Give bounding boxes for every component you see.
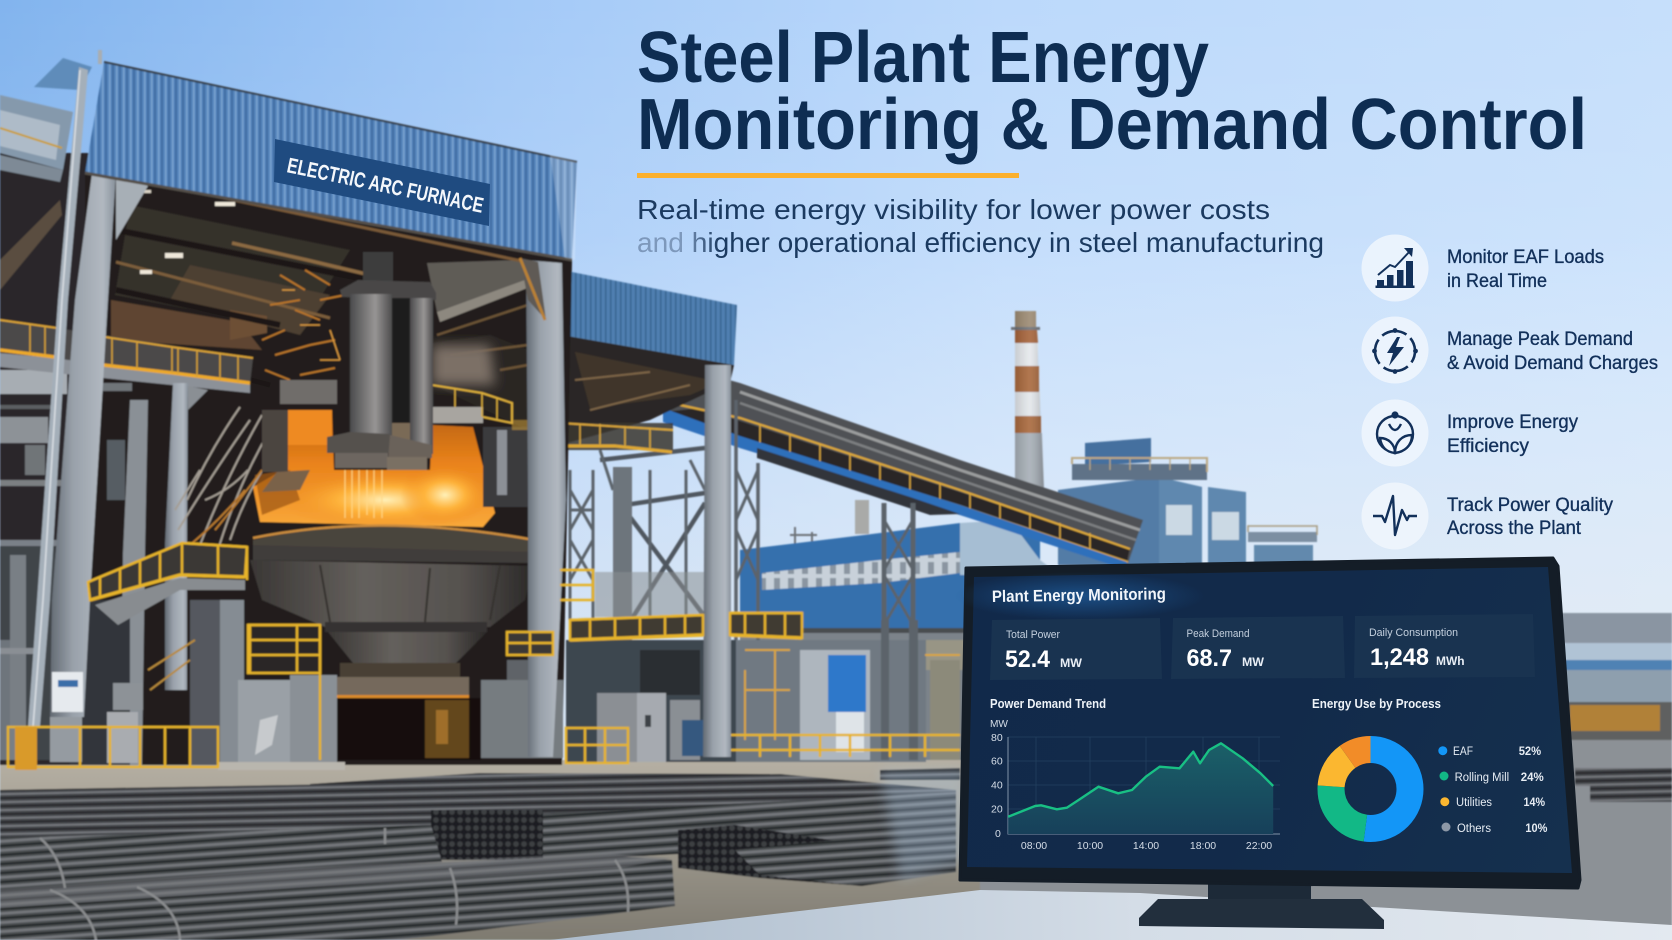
feature: monitor EAF loads: Monitor EAF Loads bbox=[1447, 247, 1604, 268]
front rebar bundles bbox=[0, 825, 675, 940]
chart axis labels: 0 bbox=[995, 828, 1001, 840]
desk surface bbox=[550, 890, 1672, 940]
KPI card: total power: 52.4 bbox=[1005, 646, 1051, 673]
feature: track power quality: Across the Plant bbox=[1447, 518, 1582, 539]
donut legend: Others bbox=[1457, 823, 1491, 835]
fire and molten glow bbox=[253, 410, 495, 530]
furnace base and tap opening bbox=[107, 600, 563, 770]
KPI card: daily consumption: Daily Consumption bbox=[1369, 627, 1458, 639]
chart axis labels: 08:00 bbox=[1021, 840, 1047, 852]
donut chart: energy use by process bbox=[1331, 750, 1410, 828]
chart axis labels: MW bbox=[990, 718, 1008, 730]
main grey columns bbox=[28, 67, 731, 762]
haze over left of monitor bbox=[880, 770, 965, 880]
far right shed building bbox=[1555, 613, 1672, 748]
right platform yellow rails bbox=[570, 613, 802, 640]
feature: track power quality: Track Power Quality bbox=[1447, 495, 1613, 516]
KPI card: daily consumption: 1,248 bbox=[1370, 644, 1429, 671]
main title bbox=[637, 18, 1587, 165]
underside of second roof bbox=[560, 335, 734, 452]
KPI card: total power bbox=[990, 618, 1162, 680]
icon: leaf in ring bbox=[1377, 413, 1413, 453]
KPI card: peak demand: 68.7 bbox=[1186, 645, 1232, 672]
hazy machinery behind trusses bbox=[595, 572, 705, 617]
striped chimney bbox=[1011, 311, 1044, 490]
chart axis labels: 20 bbox=[991, 804, 1003, 816]
second roof left return bbox=[460, 285, 530, 330]
stair platform yellow rails bbox=[88, 543, 593, 760]
column behind right platform bbox=[613, 467, 632, 760]
title glow bbox=[955, 572, 1205, 620]
first roof with corrugated panel bbox=[85, 62, 577, 260]
hall secondary columns bbox=[70, 383, 208, 765]
donut legend: 52% bbox=[1519, 746, 1541, 758]
KPI card: total power: MW bbox=[1060, 656, 1083, 670]
icon: bolt in dial bbox=[1367, 323, 1423, 379]
chart axis labels: 22:00 bbox=[1246, 840, 1272, 852]
monitor screen bbox=[967, 567, 1572, 873]
donut legend bbox=[1438, 746, 1547, 835]
icon: waveform bbox=[1373, 496, 1417, 535]
KPI card: peak demand: MW bbox=[1242, 655, 1265, 669]
chart axis labels bbox=[990, 718, 1272, 852]
main title: Steel Plant Energy bbox=[637, 18, 1209, 98]
feature: manage peak demand bbox=[1362, 316, 1658, 384]
icon: rising bar chart bbox=[1376, 248, 1414, 288]
feature: monitor EAF loads bbox=[1362, 234, 1604, 302]
monitor stand bbox=[1139, 880, 1384, 929]
donut legend: 14% bbox=[1524, 797, 1545, 809]
feature: improve energy efficiency bbox=[1362, 400, 1578, 466]
chart heading: power demand trend: Power Demand Trend bbox=[990, 696, 1106, 711]
title underline bbox=[637, 173, 1019, 178]
small distant chimney and mast bbox=[790, 500, 869, 545]
KPI card: peak demand: Peak Demand bbox=[1186, 628, 1250, 640]
machinery below right platform bbox=[566, 620, 960, 762]
feature: track power quality bbox=[1362, 482, 1613, 550]
feature: manage peak demand: Manage Peak Demand bbox=[1447, 329, 1633, 350]
chart axis labels: 10:00 bbox=[1077, 840, 1103, 852]
donut legend: Utilities bbox=[1456, 797, 1492, 809]
sign: electric arc furnace bbox=[274, 139, 490, 226]
electrode columns bbox=[327, 252, 436, 470]
ground level yellow fences bbox=[8, 727, 960, 770]
ground concrete bbox=[0, 740, 1672, 940]
chart axis labels: 14:00 bbox=[1133, 840, 1159, 852]
subtitle bbox=[637, 194, 1324, 258]
KPI card: total power: Total Power bbox=[1006, 629, 1060, 641]
dashboard title: Plant Energy Monitoring bbox=[992, 585, 1166, 606]
right blue process building bbox=[1058, 438, 1317, 565]
second roof panel bbox=[562, 270, 737, 365]
mottled machinery left of electrodes bbox=[262, 270, 345, 380]
line chart: power demand trend bbox=[990, 718, 1280, 852]
grey electrical cabinet bbox=[597, 693, 666, 762]
KPI card: daily consumption bbox=[1354, 614, 1535, 678]
main title: Monitoring & Demand Control bbox=[637, 85, 1587, 165]
feature: manage peak demand: & Avoid Demand Charges bbox=[1447, 353, 1658, 374]
donut legend: 24% bbox=[1521, 772, 1544, 784]
sign: electric arc furnace: ELECTRIC ARC FURNACE bbox=[285, 153, 486, 218]
monitor bezel bbox=[960, 558, 1580, 888]
hoses and cables left of furnace bbox=[175, 407, 285, 560]
KPI card: daily consumption: MWh bbox=[1436, 654, 1464, 668]
chart axis labels: 18:00 bbox=[1190, 840, 1216, 852]
dark rebar end stacks bbox=[431, 810, 956, 886]
donut legend: EAF bbox=[1453, 746, 1473, 758]
steel truss towers bbox=[570, 400, 913, 760]
main hall interior bbox=[85, 173, 572, 765]
furnace transformer block bbox=[262, 380, 337, 492]
conveyor bridge bbox=[663, 372, 1143, 570]
donut legend: 10% bbox=[1525, 823, 1547, 835]
subtitle: and higher operational efficiency in steel manufacturing bbox=[637, 227, 1324, 258]
back rebar stacks bbox=[0, 768, 960, 860]
chart axis labels: 60 bbox=[991, 756, 1003, 768]
mid blue factory building bbox=[740, 520, 1060, 763]
feature: improve energy efficiency: Improve Energy bbox=[1447, 412, 1578, 433]
subtitle: Real-time energy visibility for lower power costs bbox=[637, 194, 1270, 225]
white panel sign on column bbox=[52, 672, 83, 712]
furnace vessel bbox=[250, 525, 534, 677]
walkway with yellow rails bbox=[0, 320, 253, 393]
feature: monitor EAF loads: in Real Time bbox=[1447, 271, 1547, 292]
donut legend: Rolling Mill bbox=[1455, 772, 1509, 784]
chart axis labels: 40 bbox=[991, 780, 1003, 792]
right side platform above fire bbox=[432, 385, 528, 507]
chart axis labels: 80 bbox=[991, 732, 1003, 744]
chart heading: energy use by process: Energy Use by Process bbox=[1312, 696, 1441, 711]
feature: improve energy efficiency: Efficiency bbox=[1447, 436, 1530, 457]
left annex building bbox=[0, 58, 92, 765]
KPI card: peak demand bbox=[1171, 616, 1345, 679]
monitor bbox=[955, 558, 1580, 929]
